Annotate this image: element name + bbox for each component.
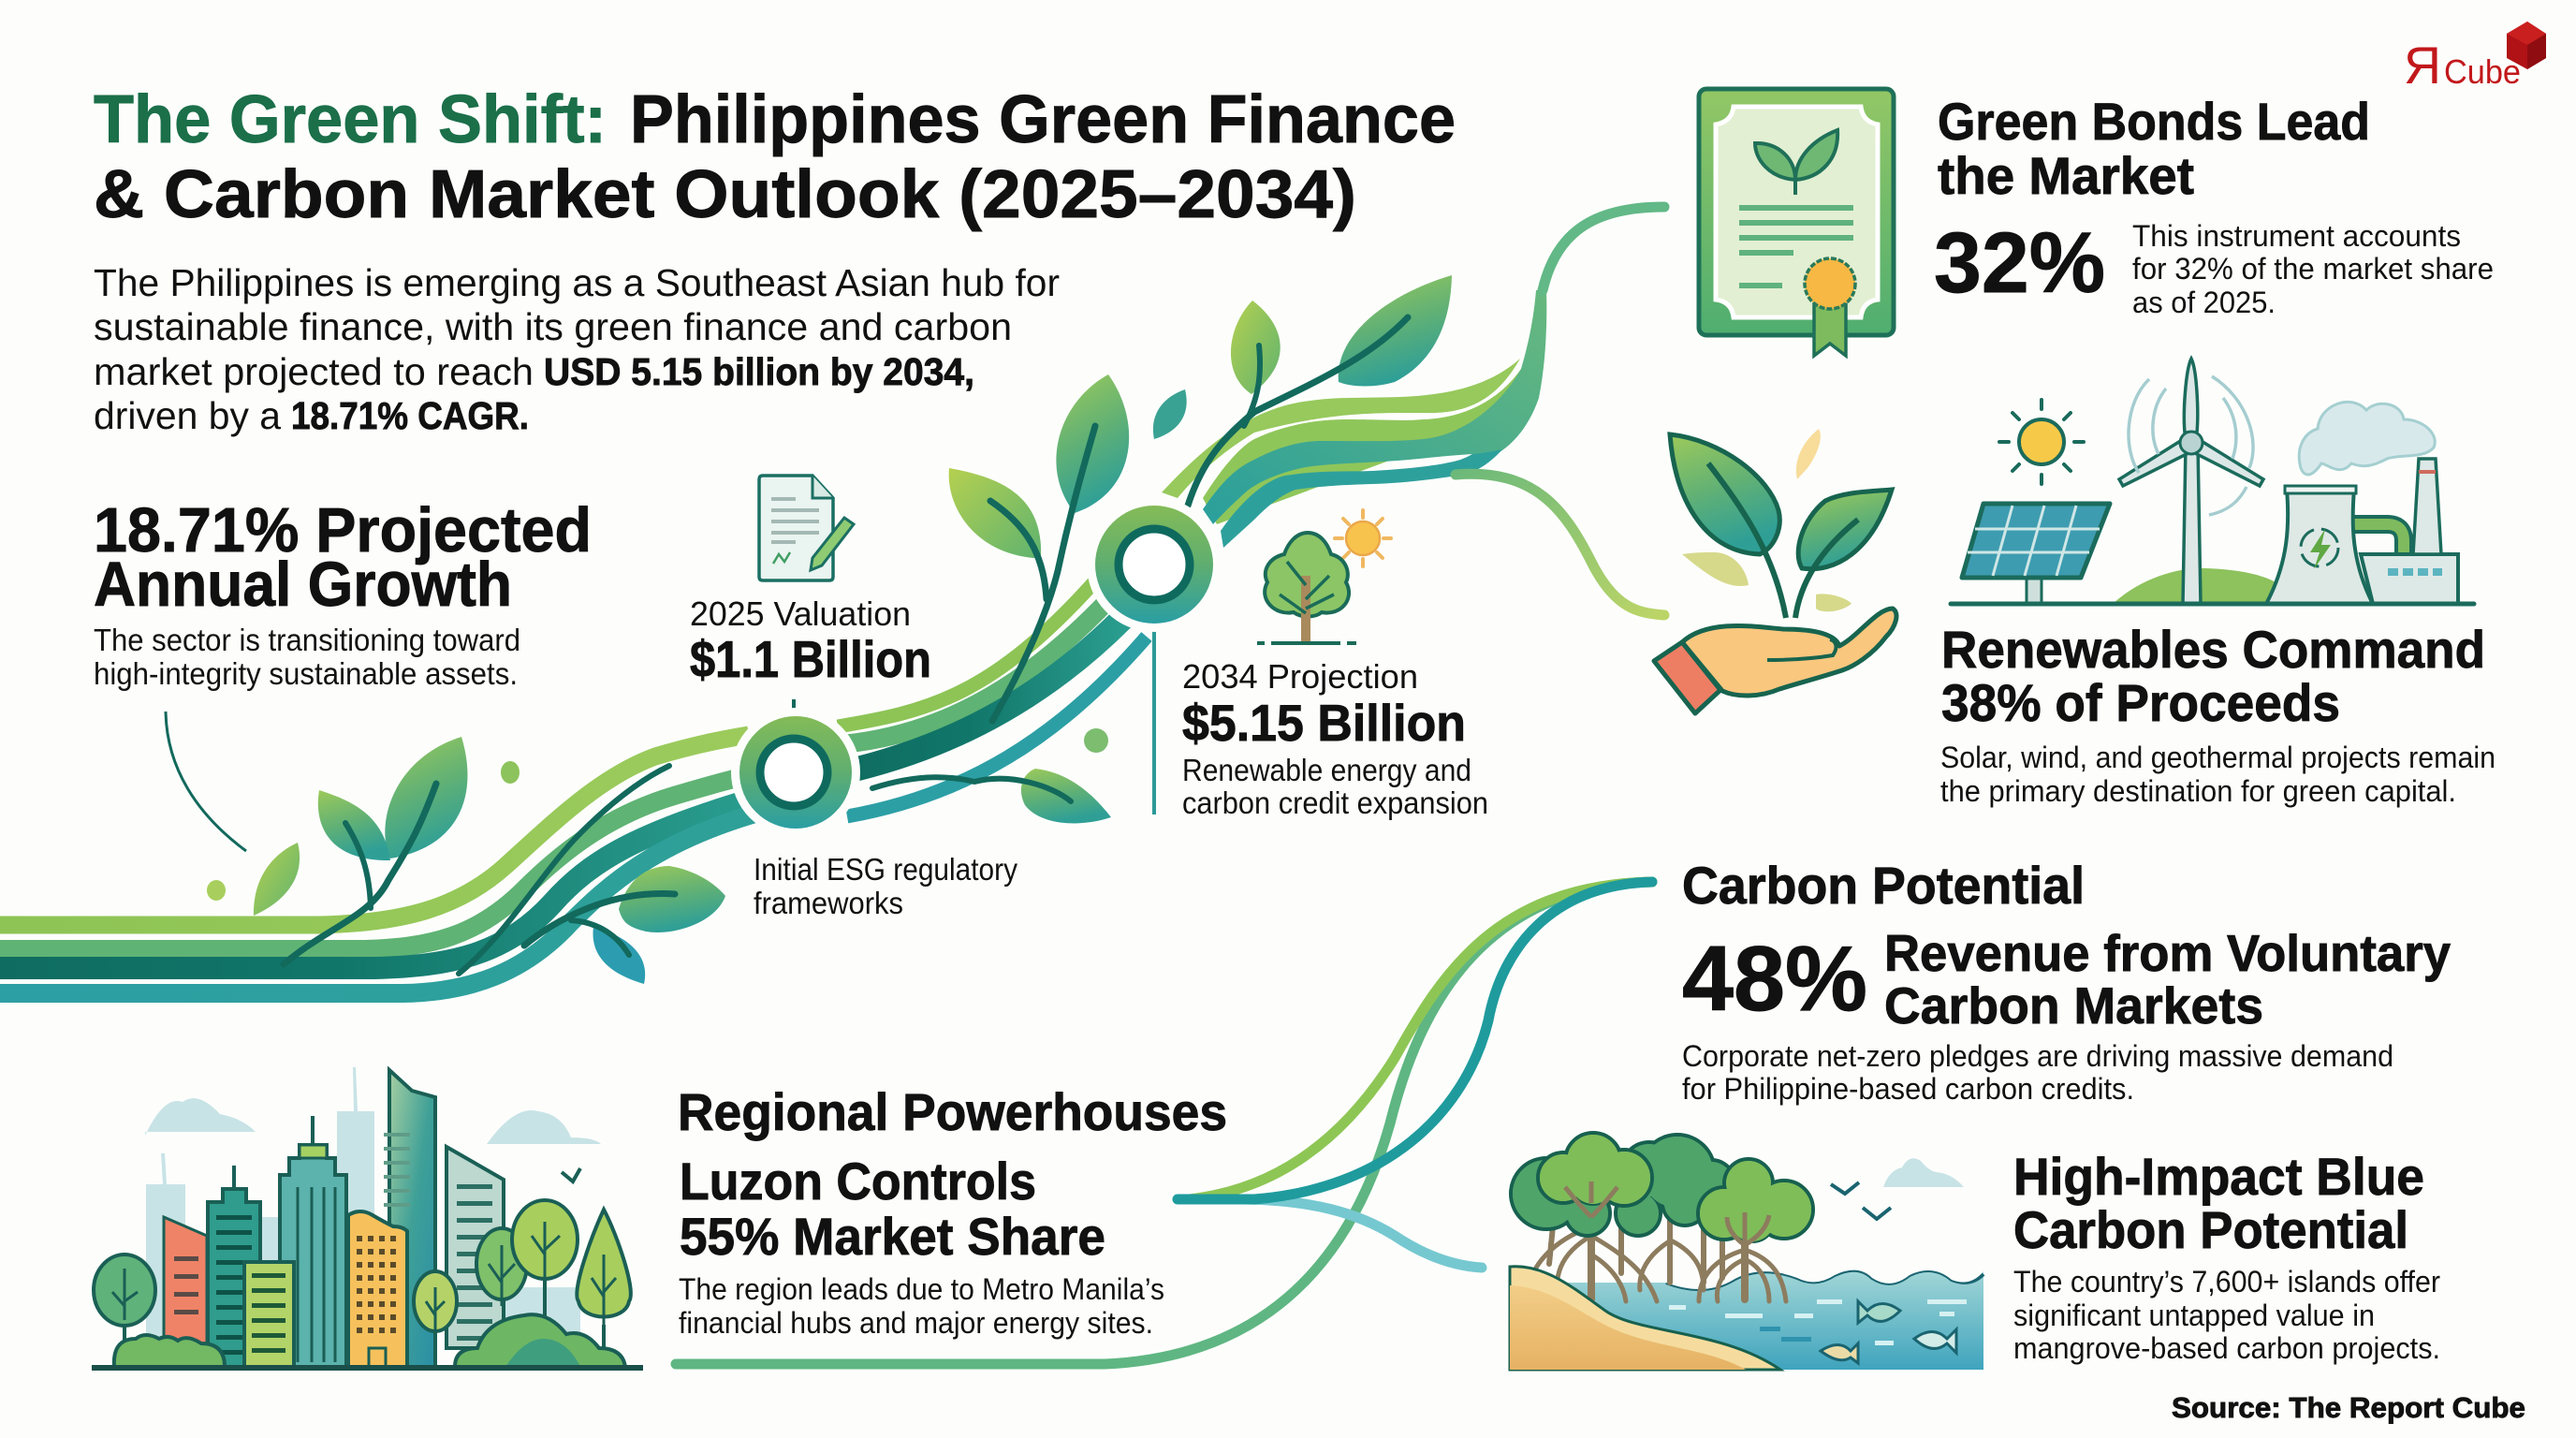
valuation 2025 label xyxy=(690,594,931,688)
milestone node 2034 xyxy=(1087,497,1222,814)
renewables text: 38% of Proceeds xyxy=(1941,673,2340,732)
regional powerhouses text: The region leads due to Metro Manila’s xyxy=(679,1272,1164,1306)
initial ESG note: Initial ESG regulatory xyxy=(754,852,1017,887)
mangrove front crowns xyxy=(1538,1133,1813,1241)
icon: hand holding sprout xyxy=(1654,429,1896,713)
renewables text xyxy=(1940,620,2496,808)
intro paragraph: 18.71% CAGR. xyxy=(291,394,529,437)
renewables text: Renewables Command xyxy=(1941,620,2485,679)
blue carbon text: The country’s 7,600+ islands offer xyxy=(2013,1265,2440,1299)
projection 2034 label xyxy=(1182,657,1488,820)
regional powerhouses text xyxy=(678,1082,1227,1340)
regional powerhouses text: financial hubs and major energy sites. xyxy=(679,1306,1153,1340)
connector to green bonds xyxy=(1543,207,1664,290)
green bonds text xyxy=(1934,92,2494,319)
regional powerhouses text: 55% Market Share xyxy=(680,1207,1105,1266)
ribbon bands left section xyxy=(0,735,758,993)
projection 2034 label: 2034 Projection xyxy=(1182,657,1418,696)
left sprout leaves xyxy=(207,737,725,984)
connectors: regional to carbon xyxy=(676,882,1652,1364)
projection 2034 label: Renewable energy and xyxy=(1182,753,1471,787)
blue carbon text: Carbon Potential xyxy=(2013,1200,2408,1259)
intro paragraph: sustainable finance, with its green finance and carbon xyxy=(94,305,1012,348)
regional powerhouses text: Regional Powerhouses xyxy=(678,1082,1227,1141)
sand shore xyxy=(1510,1267,1780,1370)
cloud and birds xyxy=(1883,1158,1964,1187)
renewables text: the primary destination for green capital. xyxy=(1940,774,2456,808)
carbon potential text xyxy=(1682,856,2451,1106)
logo xyxy=(2404,22,2546,95)
annual growth stat: The sector is transitioning toward xyxy=(94,623,520,657)
valuation 2025 label: 2025 Valuation xyxy=(690,594,911,633)
carbon potential text: Carbon Markets xyxy=(1884,976,2263,1034)
icon: tree and sun xyxy=(1257,510,1391,643)
title: Philippines Green Finance xyxy=(630,82,1456,157)
mangrove back crowns xyxy=(1511,1135,1735,1236)
carbon potential text: 48% xyxy=(1682,927,1867,1030)
projection 2034 label: $5.15 Billion xyxy=(1182,694,1466,752)
projection 2034 label: carbon credit expansion xyxy=(1182,785,1488,820)
green bonds text: This instrument accounts xyxy=(2132,219,2461,253)
icon: document with pencil xyxy=(759,476,854,580)
connector to renewables xyxy=(1456,474,1664,615)
fish and water details xyxy=(1669,1299,1967,1363)
blue carbon text: mangrove-based carbon projects. xyxy=(2013,1331,2440,1365)
carbon potential text: Revenue from Voluntary xyxy=(1884,924,2451,982)
green bonds text: as of 2025. xyxy=(2132,286,2276,319)
annual growth stat: high-integrity sustainable assets. xyxy=(94,656,518,691)
icon: mangrove coastline xyxy=(1510,1133,1983,1370)
intro paragraph: USD 5.15 billion by 2034, xyxy=(544,350,974,393)
intro paragraph: The Philippines is emerging as a Southeast Asian hub for xyxy=(94,261,1060,304)
annual growth stat: Annual Growth xyxy=(94,550,512,620)
initial ESG note: frameworks xyxy=(754,886,903,920)
annual growth stat xyxy=(94,495,592,691)
ribbon bands right section xyxy=(1162,290,1546,548)
valuation 2025 label: $1.1 Billion xyxy=(690,630,931,688)
centre leaves xyxy=(949,275,1452,823)
annual growth stat: 18.71% Projected xyxy=(94,495,592,565)
icon: city skyline xyxy=(92,1067,643,1368)
green bonds text: for 32% of the market share xyxy=(2132,252,2494,286)
green bonds text: 32% xyxy=(1934,215,2105,311)
icon: renewable energy scene xyxy=(1951,359,2474,604)
blue carbon text: significant untapped value in xyxy=(2013,1299,2375,1332)
left sprout stems xyxy=(284,766,675,974)
logo: Я xyxy=(2404,36,2441,95)
centre stems xyxy=(872,317,1408,801)
intro paragraph xyxy=(94,261,1060,437)
green bonds text: the Market xyxy=(1938,146,2194,205)
growth ribbon illustration xyxy=(0,207,1664,993)
icon: green bond certificate xyxy=(1699,89,1894,356)
initial ESG note xyxy=(754,852,1017,920)
title: & Carbon Market Outlook (2025–2034) xyxy=(94,157,1356,232)
mangrove trunks and roots xyxy=(1526,1180,1786,1301)
title: The Green Shift: xyxy=(94,82,607,157)
intro paragraph: driven by a xyxy=(94,394,281,437)
carbon potential text: Corporate net-zero pledges are driving massive demand xyxy=(1682,1039,2393,1073)
blue carbon text: High-Impact Blue xyxy=(2013,1147,2424,1206)
regional powerhouses text: Luzon Controls xyxy=(680,1152,1036,1211)
logo: Cube xyxy=(2444,52,2521,91)
carbon potential text: for Philippine-based carbon credits. xyxy=(1682,1072,2134,1106)
ribbon bands middle section xyxy=(838,576,1147,816)
blue carbon text xyxy=(2013,1147,2440,1365)
source: Source: The Report Cube xyxy=(2172,1391,2525,1424)
intro paragraph: market projected to reach xyxy=(94,350,534,393)
title xyxy=(94,82,1456,232)
callout line for annual growth xyxy=(166,712,246,851)
green bonds text: Green Bonds Lead xyxy=(1938,92,2370,151)
renewables text: Solar, wind, and geothermal projects remain xyxy=(1940,741,2496,774)
milestone node 2025 xyxy=(731,699,860,837)
carbon potential text: Carbon Potential xyxy=(1682,856,2085,915)
